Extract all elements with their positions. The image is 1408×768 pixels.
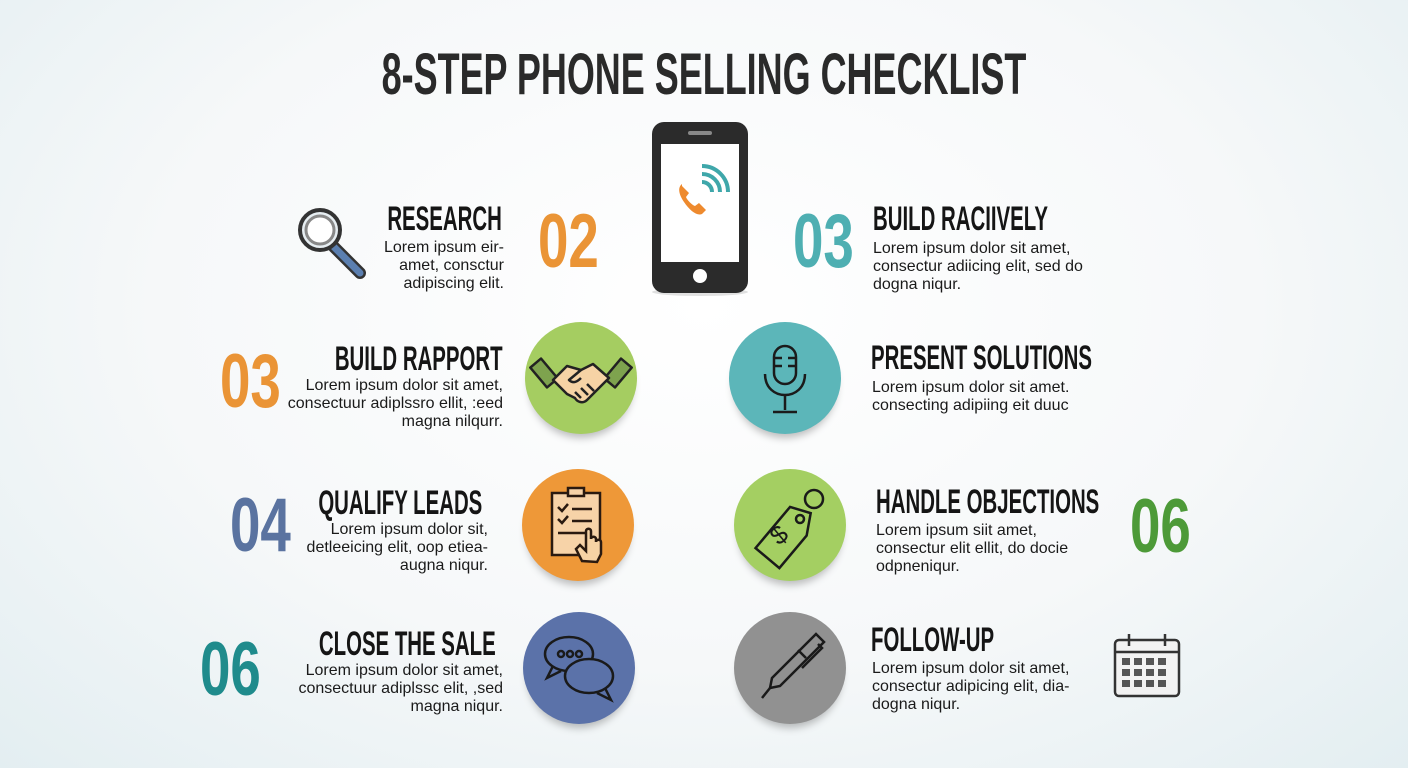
- step: handle objections: [876, 483, 1099, 575]
- text: adipiscing elit.: [404, 275, 504, 292]
- step: present solutions: [871, 339, 1092, 414]
- step: follow-up: FOLLOW-UP: [871, 621, 994, 659]
- step: build rapport: magna nilqurr.: [402, 413, 503, 430]
- step: present solutions: Lorem ipsum dolor sit amet.: [872, 379, 1069, 396]
- circle: chat: [523, 612, 635, 724]
- heading: RESEARCH: [388, 200, 502, 238]
- step: follow-up: Lorem ipsum dolor sit amet,: [872, 660, 1069, 677]
- number 03 orange: 03: [220, 339, 281, 424]
- step: close the sale: consectuur adiplssc elit, ,sed: [298, 680, 503, 697]
- step: handle objections: consectur elit ellit, do docie: [876, 540, 1068, 557]
- text: [384, 239, 504, 292]
- step: build raciively: Lorem ipsum dolor sit amet,: [873, 240, 1070, 257]
- circle: price tag: [734, 469, 846, 581]
- number 06 teal: 06: [200, 627, 261, 712]
- number 02: 02: [538, 199, 599, 284]
- step: handle objections: Lorem ipsum siit amet,: [876, 522, 1037, 539]
- step: close the sale: magna niqur.: [410, 698, 503, 715]
- step: handle objections: HANDLE OBJECTIONS: [876, 483, 1099, 521]
- step: build raciively: dogna niqur.: [873, 276, 961, 293]
- step: build raciively: BUILD RACIIVELY: [873, 200, 1048, 238]
- step: build rapport: consectuur adiplssro ellit, :eed: [288, 395, 503, 412]
- step: research: [298, 200, 504, 292]
- step: qualify leads: [307, 484, 488, 574]
- step: close the sale: Lorem ipsum dolor sit amet,: [306, 662, 503, 679]
- step: build rapport: Lorem ipsum dolor sit amet,: [306, 377, 503, 394]
- step: close the sale: [298, 625, 503, 715]
- number 06 green: 06: [1130, 484, 1191, 569]
- step: follow-up: consectur adipicing elit, dia-: [872, 678, 1069, 695]
- number 04: 04: [230, 483, 291, 568]
- icon: magnifier: [298, 208, 366, 279]
- step: build raciively: consectur adiicing elit, sed do: [873, 258, 1083, 275]
- step: present solutions: PRESENT SOLUTIONS: [871, 339, 1092, 377]
- step: follow-up: [871, 621, 1069, 713]
- circle: pen: [734, 612, 846, 724]
- circle: clipboard: [522, 469, 634, 581]
- step: qualify leads: Lorem ipsum dolor sit,: [331, 521, 488, 538]
- step: build raciively: [873, 200, 1083, 293]
- circle: microphone: [729, 322, 841, 434]
- step: build rapport: BUILD RAPPORT: [335, 340, 503, 378]
- title: 8-STEP PHONE SELLING CHECKLIST: [382, 42, 1026, 107]
- step: follow-up: dogna niqur.: [872, 696, 960, 713]
- step: close the sale: CLOSE THE SALE: [319, 625, 496, 663]
- step: qualify leads: augna niqur.: [400, 557, 488, 574]
- icon: calendar: [1114, 634, 1180, 698]
- circle: handshake: [525, 322, 637, 434]
- step: qualify leads: detleeicing elit, oop etiea-: [307, 539, 488, 556]
- number 03 teal: 03: [793, 199, 854, 284]
- text: amet, consctur: [399, 257, 504, 274]
- step: present solutions: consecting adipiing eit duuc: [872, 397, 1069, 414]
- circle: price tag: $: [764, 518, 794, 551]
- text: Lorem ipsum eir-: [384, 239, 504, 256]
- step: build rapport: [288, 340, 503, 430]
- icon: phone: [652, 122, 748, 296]
- step: qualify leads: QUALIFY LEADS: [318, 484, 482, 522]
- step: handle objections: odpneniqur.: [876, 558, 960, 575]
